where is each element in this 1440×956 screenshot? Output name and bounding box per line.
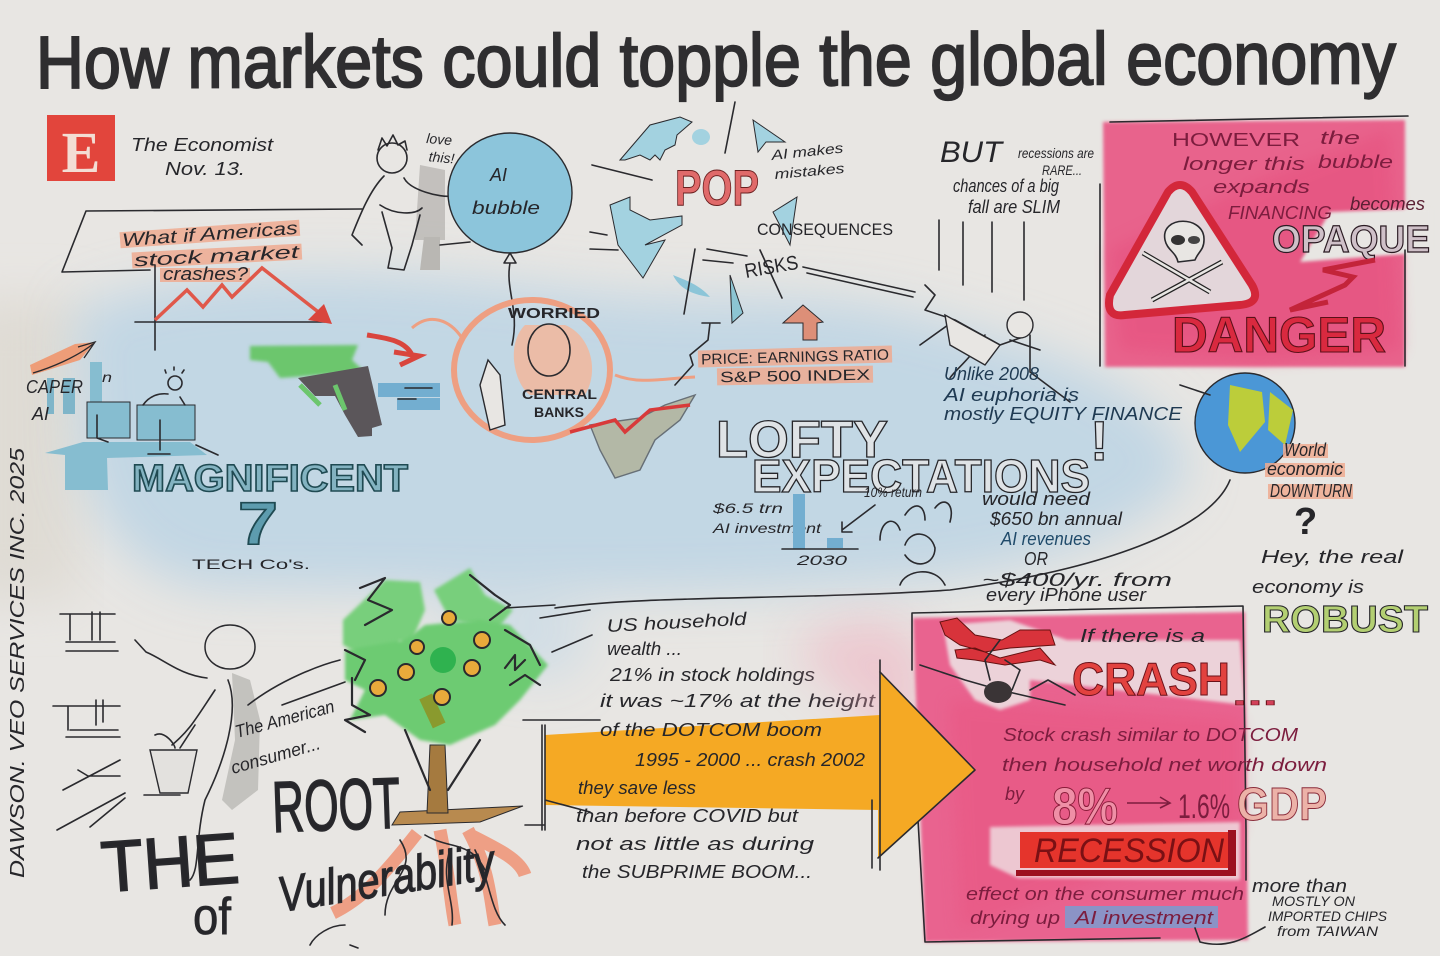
chart: stock market crash	[62, 209, 470, 350]
world downturn note: DOWNTURN	[1270, 481, 1353, 501]
household wealth note	[505, 605, 876, 711]
danger panel: bubble	[1318, 152, 1393, 172]
crash panel content: AI investment	[1074, 908, 1214, 928]
watercolour wash: blue	[75, 274, 1190, 680]
worried central banks: CENTRAL	[522, 386, 597, 402]
orange arrow	[523, 660, 975, 870]
crash panel content: 8%	[1052, 778, 1118, 836]
revenue note: ~$400/yr. from	[982, 570, 1172, 590]
AI bubble	[448, 133, 572, 345]
arrow notes: they save less	[578, 778, 696, 798]
crash panel content: drying up	[970, 908, 1060, 928]
revenue note: would need	[982, 489, 1091, 509]
source note	[131, 135, 274, 179]
worried central banks: BANKS	[534, 404, 584, 420]
pop burst: mistakes	[774, 160, 845, 182]
crash panel content: then household net worth down	[1002, 755, 1327, 775]
arrow notes: not as little as during	[576, 834, 814, 854]
but recessions are rare: recessions are	[1018, 145, 1094, 161]
world downturn note: ROBUST	[1262, 599, 1428, 641]
revenue note: AI revenues	[1000, 529, 1091, 549]
magnificent 7: MAGNIFICENT	[132, 458, 408, 500]
caper on AI: AI	[31, 404, 49, 424]
unlike 2008 note	[943, 364, 1183, 424]
crash panel content: CRASH	[1072, 653, 1230, 705]
note: love this: love	[426, 130, 453, 148]
world downturn note: economic	[1267, 459, 1343, 479]
arrow notes: 1995 - 2000 ... crash 2002	[635, 750, 865, 770]
revenue note: OR	[1024, 549, 1048, 569]
household wealth note: US household	[606, 609, 748, 636]
green wash and ledge	[250, 345, 440, 437]
household wealth note: it was ~17% at the height	[600, 691, 876, 711]
investment mini chart: 10% return	[864, 484, 922, 500]
household wealth note: 21% in stock holdings	[609, 665, 815, 685]
crowd sketch	[880, 502, 951, 585]
crash panel content: Stock crash similar to DOTCOM	[1003, 725, 1298, 745]
unlike 2008 note: Unlike 2008	[944, 364, 1039, 384]
pop burst	[590, 102, 845, 323]
danger panel: becomes	[1350, 194, 1425, 214]
pop burst: POP	[675, 160, 759, 216]
price earnings note	[675, 305, 892, 386]
crash panel content: 1.6%	[1178, 788, 1230, 826]
Economist logo	[47, 115, 115, 185]
crash panel content: RECESSION	[1034, 832, 1224, 870]
revenue note: every iPhone user	[986, 585, 1147, 605]
price earnings note: PRICE: EARNINGS RATIO	[701, 347, 889, 368]
map with red trend	[570, 395, 695, 478]
investment mini chart	[712, 484, 922, 568]
consumer note: The American	[233, 696, 337, 742]
danger panel: OPAQUE	[1272, 219, 1430, 261]
but recessions are rare	[939, 136, 1094, 300]
AI bubble: AI	[489, 165, 507, 185]
danger panel: DANGER	[1172, 307, 1386, 363]
globe	[555, 373, 1295, 608]
pop burst: AI makes	[769, 140, 844, 163]
consequences and risks: RISKS	[743, 252, 800, 283]
crash panel content: ...	[1232, 679, 1278, 712]
falling man	[920, 285, 1070, 402]
worried central banks: WORRIED	[508, 305, 600, 322]
figure: man holding pin	[352, 135, 452, 270]
chart: stock market crash: crashes?	[163, 264, 248, 284]
danger panel: longer this	[1183, 154, 1305, 174]
world downturn note	[1252, 440, 1428, 641]
but recessions are rare: chances of a big	[953, 176, 1059, 196]
caper on AI	[26, 342, 112, 424]
source note: Nov. 13.	[165, 159, 245, 179]
consequences and risks: CONSEQUENCES	[757, 220, 893, 239]
investment mini chart: 2030	[795, 552, 847, 568]
note: love this: this!	[428, 148, 455, 167]
caper on AI: on	[92, 369, 112, 385]
chart: stock market crash: What if Americas	[121, 218, 298, 250]
AI bubble: bubble	[472, 198, 540, 218]
lofty expectations: LOFTY	[716, 411, 888, 469]
danger panel: expands	[1213, 177, 1310, 197]
root heading: ROOT	[271, 764, 401, 848]
household wealth note: wealth ...	[607, 639, 682, 659]
but recessions are rare: BUT	[940, 136, 1005, 169]
root heading	[99, 764, 401, 946]
caper on AI: CAPER	[26, 377, 83, 397]
lofty expectations: !	[1090, 409, 1109, 472]
crash panel content	[920, 618, 1327, 928]
falling arrow	[367, 335, 419, 365]
lofty expectations	[716, 409, 1109, 502]
arrow notes: the SUBPRIME BOOM...	[582, 862, 812, 882]
revenue note: $650 bn annual	[989, 509, 1123, 529]
danger panel: FINANCING	[1228, 203, 1332, 223]
crash panel wash	[790, 606, 1248, 942]
but recessions are rare: fall are SLIM	[968, 197, 1060, 217]
magnificent 7	[132, 458, 408, 572]
chart: stock market crash: stock market	[133, 242, 301, 270]
lofty expectations: EXPECTATIONS	[752, 450, 1090, 502]
crash panel content: If there is a	[1080, 626, 1205, 646]
magnificent 7: 7	[238, 490, 278, 557]
crash panel content: by	[1005, 784, 1025, 804]
imported chips note: MOSTLY ON	[1272, 893, 1356, 909]
root heading: of	[193, 888, 231, 946]
consequences and risks	[743, 220, 915, 297]
Economist logo: E	[62, 120, 100, 185]
imported chips note: more than	[1252, 876, 1347, 896]
revenue note	[982, 489, 1172, 605]
imported chips note: IMPORTED CHIPS	[1268, 908, 1388, 924]
imported chips note	[1195, 876, 1388, 944]
danger panel: the	[1320, 128, 1360, 148]
arrow notes	[576, 720, 865, 882]
imported chips note: from TAIWAN	[1277, 923, 1379, 939]
danger panel: HOWEVER	[1172, 130, 1300, 150]
root heading: THE	[99, 819, 242, 908]
world downturn note: economy is	[1252, 577, 1364, 597]
crash panel content: GDP	[1237, 778, 1327, 830]
vulnerability word: Vulnerability	[274, 833, 500, 923]
crash panel content: effect on the consumer much	[966, 884, 1244, 904]
source note: The Economist	[131, 135, 274, 155]
side credit: DAWSON. VEO SERVICES INC. 2025	[7, 447, 29, 878]
investment mini chart: AI investment	[712, 520, 822, 536]
unlike 2008 note: mostly EQUITY FINANCE	[944, 404, 1183, 424]
world downturn note: Hey, the real	[1261, 547, 1404, 567]
danger panel	[1100, 116, 1432, 367]
arrow notes: of the DOTCOM boom	[600, 720, 822, 740]
world downturn note: ?	[1294, 501, 1317, 543]
magnificent 7: TECH Co's.	[192, 556, 310, 572]
consumer note second line: consumer...	[229, 733, 323, 778]
investment mini chart: $6.5 trn	[712, 500, 783, 516]
desk workers	[45, 362, 218, 490]
tree	[310, 568, 548, 948]
world downturn note: World	[1284, 440, 1327, 460]
shop shelves and consumer	[53, 612, 345, 880]
unlike 2008 note: AI euphoria is	[943, 385, 1079, 405]
worried central banks	[412, 300, 695, 440]
arrow notes: than before COVID but	[576, 806, 799, 826]
price earnings note: S&P 500 INDEX	[720, 367, 870, 386]
but recessions are rare: RARE...	[1042, 162, 1082, 178]
